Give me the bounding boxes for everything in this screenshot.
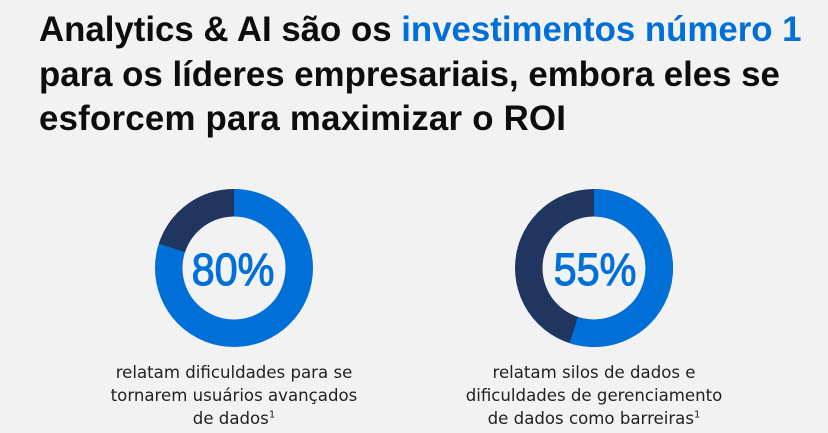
title: para os líderes empresariais, embora eles se bbox=[39, 55, 780, 94]
donut chart: 80% bbox=[155, 189, 313, 347]
title: Analytics & AI são os investimentos número 1 bbox=[39, 10, 802, 49]
donut chart: 55%: 55% bbox=[554, 245, 636, 295]
title: esforcem para maximizar o ROI bbox=[39, 99, 566, 138]
caption: 80% bbox=[111, 363, 357, 428]
caption: 80%: relatam dificuldades para se bbox=[116, 363, 352, 382]
donut chart: 55% bbox=[515, 189, 673, 347]
caption: 55% bbox=[466, 363, 722, 428]
caption: 55%: dificuldades de gerenciamento bbox=[466, 386, 722, 405]
caption: 80%: de dados1 bbox=[193, 409, 275, 428]
caption: 55%: de dados como barreiras1 bbox=[488, 409, 700, 428]
caption: 80%: tornarem usuários avançados bbox=[111, 386, 357, 405]
caption: 55%: relatam silos de dados e bbox=[492, 363, 696, 382]
title bbox=[39, 10, 802, 138]
donut chart: 80%: 80% bbox=[192, 245, 274, 295]
